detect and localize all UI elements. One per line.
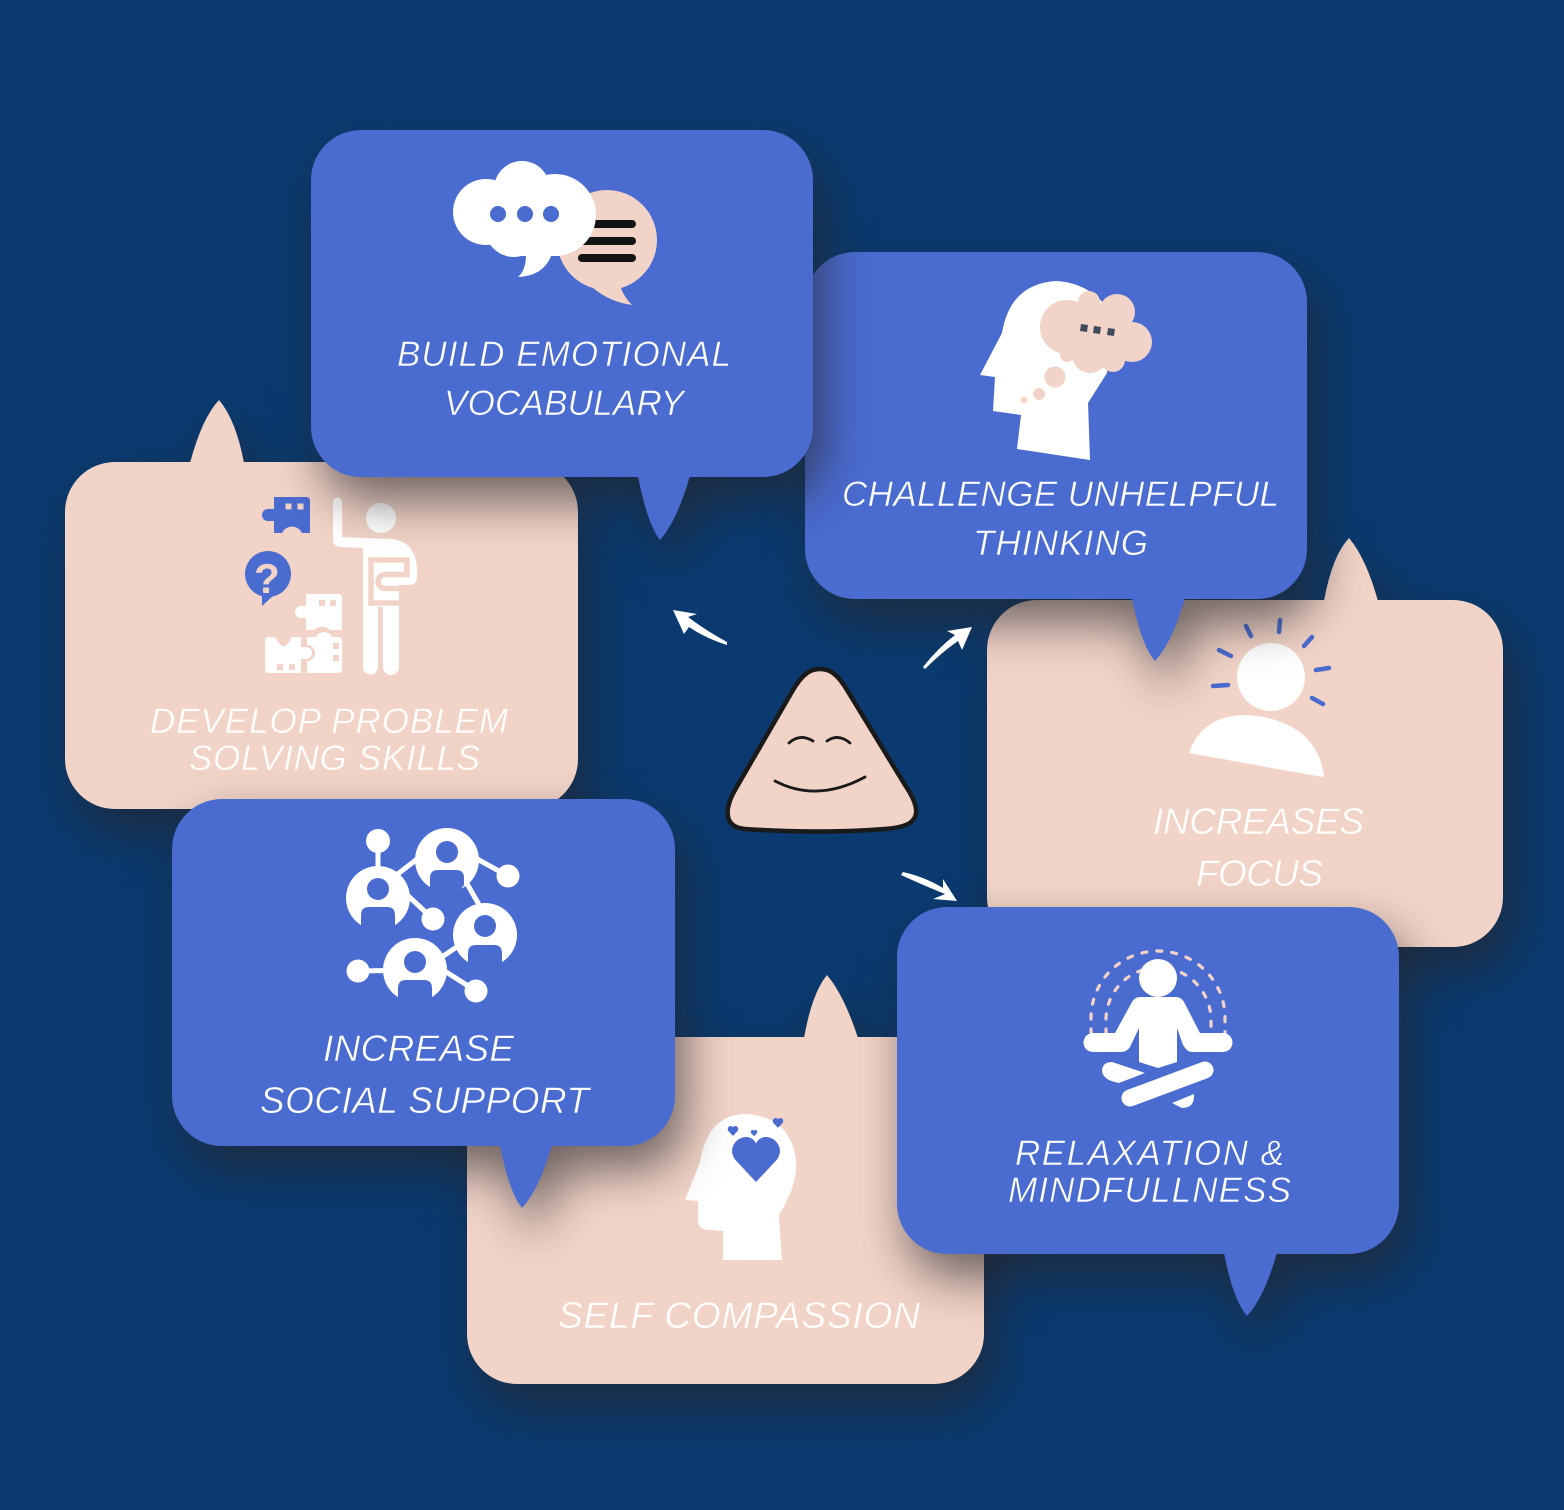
icon: person with sun head: [1189, 620, 1329, 777]
icon: speech bubbles: [453, 161, 657, 305]
panel: build emotional vocabulary: [311, 130, 813, 540]
text: build emotional vocabulary: VOCABULARY: [444, 384, 687, 423]
character: smiling triangle: [728, 669, 916, 832]
text: relaxation and mindfulness: RELAXATION &: [1015, 1134, 1284, 1173]
panel: relaxation and mindfulness: [897, 907, 1399, 1316]
icon: meditating person: [1084, 951, 1232, 1108]
text: challenge unhelpful thinking: CHALLENGE UNHELPFUL: [842, 475, 1279, 514]
icon: person solving puzzle: [245, 497, 417, 675]
text: increases focus: [1153, 801, 1364, 894]
text: increase social support: [260, 1028, 591, 1121]
icon: person solving puzzle: ?: [254, 555, 280, 602]
text: build emotional vocabulary: [397, 335, 731, 423]
panel: develop problem solving skills: [65, 400, 578, 809]
panel: challenge unhelpful thinking: [805, 252, 1307, 661]
arrow: to challenge unhelpful thinking: [923, 627, 972, 669]
text: relaxation and mindfulness: [1008, 1134, 1291, 1210]
text: increases focus: FOCUS: [1196, 853, 1323, 894]
panel: increases focus: [987, 538, 1503, 947]
icon: head with thought cloud: [980, 281, 1152, 460]
arrow: to build emotional vocabulary: [673, 610, 727, 645]
icon: people network: [346, 828, 520, 1005]
text: increase social support: INCREASE: [323, 1028, 515, 1069]
text: challenge unhelpful thinking: THINKING: [973, 524, 1148, 563]
icon: head with hearts: [685, 1114, 796, 1260]
text: increases focus: INCREASES: [1153, 801, 1364, 842]
arrow: to increases focus: [901, 872, 957, 901]
text: self compassion: SELF COMPASSION: [558, 1295, 920, 1336]
text: develop problem solving skills: SOLVING SKILLS: [189, 739, 480, 778]
text: increase social support: SOCIAL SUPPORT: [260, 1080, 591, 1121]
text: challenge unhelpful thinking: [842, 475, 1279, 563]
panel: increase social support: [172, 799, 675, 1208]
text: relaxation and mindfulness: MINDFULLNESS: [1008, 1171, 1291, 1210]
text: build emotional vocabulary: BUILD EMOTIONAL: [397, 335, 731, 374]
text: develop problem solving skills: DEVELOP PROBLEM: [150, 702, 509, 741]
panel: self compassion: [467, 975, 984, 1384]
text: develop problem solving skills: [150, 702, 509, 778]
